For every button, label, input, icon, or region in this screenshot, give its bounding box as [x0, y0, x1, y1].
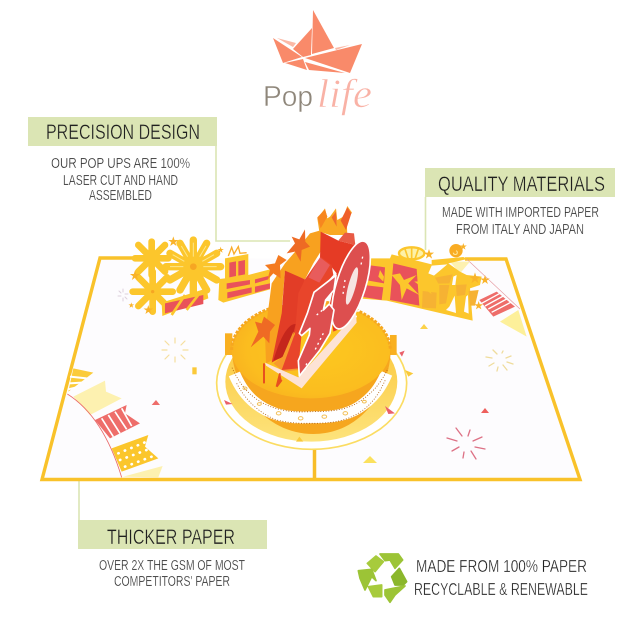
- heading: THICKER PAPER: [107, 525, 235, 549]
- body: [99, 558, 245, 590]
- body: COMPETITORS' PAPER: [114, 574, 230, 590]
- lace band: [234, 373, 387, 418]
- cake body: [232, 347, 391, 434]
- connector lines: [79, 146, 426, 520]
- gift 2: [218, 247, 270, 303]
- house windows: [422, 274, 479, 308]
- flames: [251, 206, 352, 363]
- logo: Poplife: [263, 10, 372, 116]
- body: ASSEMBLED: [89, 188, 152, 204]
- pop-up card illustration: [42, 206, 581, 480]
- cake top: [232, 302, 390, 398]
- far rim lace: [232, 302, 390, 350]
- body: FROM ITALY AND JAPAN: [456, 222, 584, 238]
- callout: quality materials: [425, 168, 615, 238]
- logo wordmark: [263, 71, 372, 116]
- firework: right yellow: [486, 350, 513, 371]
- heading: PRECISION DESIGN: [46, 120, 200, 144]
- flowers: [128, 236, 224, 314]
- lace holes: [243, 387, 366, 420]
- numeral 50 with flames: [251, 206, 378, 388]
- red back wall: [320, 232, 355, 332]
- body: [51, 156, 190, 204]
- stars: [414, 243, 490, 309]
- heading band: [425, 168, 615, 197]
- left pop-up gifts and flowers: [128, 236, 270, 316]
- body: [442, 205, 599, 238]
- lace dots: [232, 368, 388, 423]
- right pop-up gifts, house and snail: [358, 243, 490, 321]
- callout: precision design: [28, 117, 217, 204]
- callout: thicker paper: [78, 520, 267, 590]
- pale base: [265, 313, 357, 388]
- gift 1: [162, 288, 208, 316]
- logo wordmark: life: [317, 71, 372, 116]
- firework: tiny grey: [118, 289, 128, 301]
- gift burst: [378, 270, 419, 300]
- cake base plate: [217, 317, 413, 449]
- white cut-outs: [428, 264, 469, 314]
- heading band: [28, 117, 217, 146]
- corner bunting: bottom left: [67, 367, 197, 477]
- corner bunting: top right: [450, 259, 527, 337]
- logo wordmark: Pop: [263, 81, 313, 113]
- firework: left: [162, 338, 188, 362]
- body: LASER CUT AND HAND: [63, 173, 178, 189]
- side tabs: [225, 333, 397, 355]
- open card base: [42, 258, 581, 480]
- body: OVER 2X THE GSM OF MOST: [99, 558, 245, 574]
- heading band: [78, 520, 267, 549]
- digit 0: [324, 237, 378, 333]
- logo icon: origami boat: [273, 10, 362, 73]
- text: recyclable claim: [414, 556, 588, 599]
- fireworks: [118, 289, 513, 459]
- digit 5: [298, 275, 336, 376]
- body: OUR POP UPS ARE 100%: [51, 156, 190, 172]
- red pop-up walls: [272, 257, 333, 372]
- small confetti triangles: [363, 324, 489, 463]
- cake: [225, 302, 397, 434]
- ribbon fan: [399, 247, 424, 259]
- firework: right red: [447, 428, 485, 459]
- gift panels: [361, 263, 419, 306]
- yellow panel: [358, 254, 482, 321]
- snail: [449, 244, 463, 257]
- icon: recycle: [358, 554, 407, 602]
